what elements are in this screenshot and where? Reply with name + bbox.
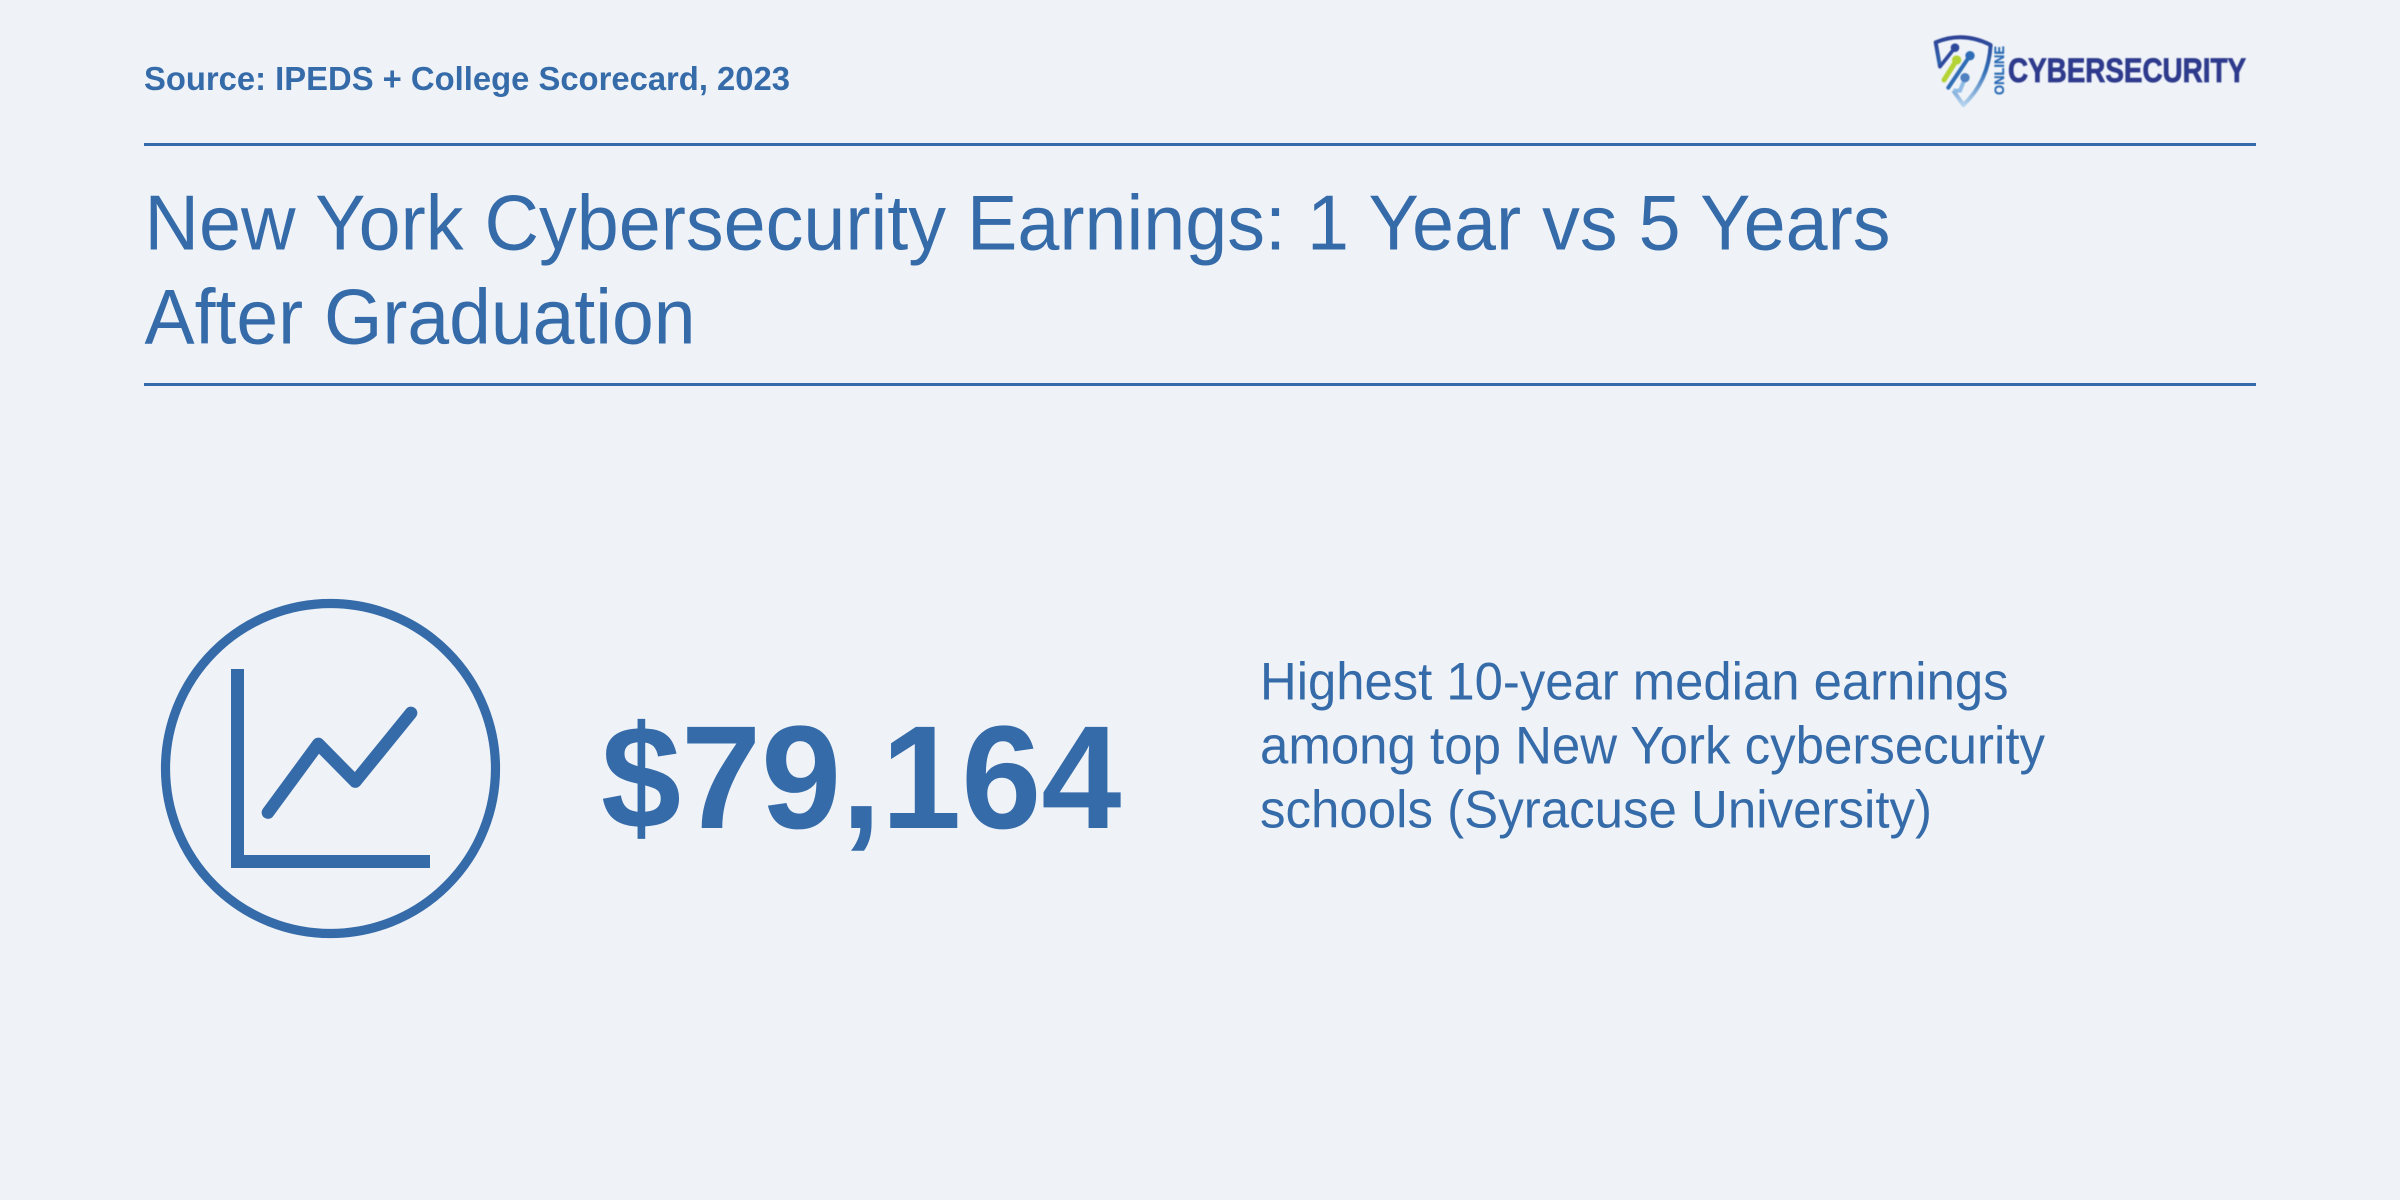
stat description: Highest 10-year median earnings — [1260, 652, 2008, 712]
stat description: schools (Syracuse University) — [1260, 780, 1932, 840]
title: New York Cybersecurity Earnings: 1 Year vs 5 Years — [144, 178, 1890, 266]
logo word: online: ONLINE — [1991, 46, 2007, 95]
title — [144, 178, 1890, 360]
title: After Graduation — [144, 272, 696, 360]
logo: Online Cybersecurity — [1936, 37, 2246, 105]
icon: shield — [1936, 37, 1991, 105]
top divider — [144, 143, 2256, 146]
icon: line chart in circle — [166, 604, 496, 934]
stat description — [1260, 652, 2046, 840]
stat description: among top New York cybersecurity — [1260, 716, 2046, 776]
bottom divider — [144, 383, 2256, 386]
big stat: $79,164 — [601, 696, 1121, 860]
source line: Source: IPEDS + College Scorecard, 2023 — [144, 61, 790, 98]
logo word: cybersecurity: CYBERSECURITY — [2008, 52, 2246, 90]
